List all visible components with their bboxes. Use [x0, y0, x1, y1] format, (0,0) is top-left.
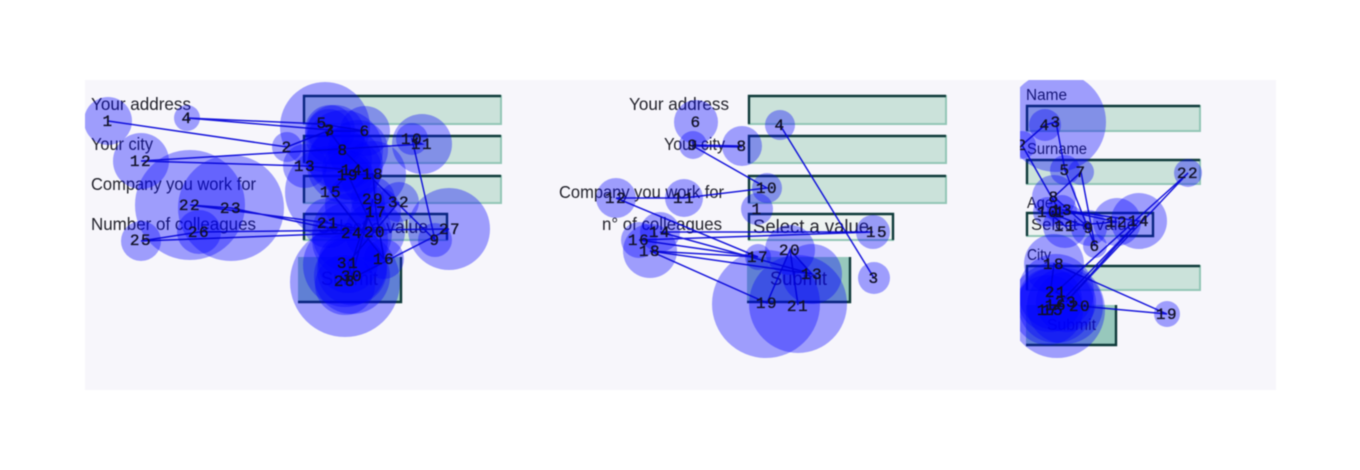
form 3 fixation numbers: 22: [1177, 165, 1199, 183]
background panel: [85, 80, 1276, 390]
form 1 fixation numbers: 25: [130, 232, 152, 250]
form 3 labels: Name: [1026, 87, 1067, 104]
form 2 fixation numbers: 15: [866, 224, 888, 242]
form 1 fixation numbers: 29: [362, 191, 384, 209]
form 1 labels: Number of colleagues: [91, 214, 256, 234]
form 2 fixation numbers: 19: [756, 295, 778, 313]
form 3 fixation numbers: 12: [1106, 214, 1128, 232]
form 1 fixation numbers: 20: [364, 224, 386, 242]
form 1 fixation circles: [84, 82, 490, 337]
form 1 fixation numbers: 30: [341, 268, 363, 286]
form 1 fixation numbers: 3: [324, 122, 336, 140]
form 1 fixation numbers: 19: [337, 167, 359, 185]
form 3 fixation numbers: 3: [1050, 114, 1062, 132]
form 1 fixation numbers: 24: [341, 225, 363, 243]
form 1 fixation numbers: [102, 110, 461, 291]
form 2 fixation numbers: 3: [868, 270, 880, 288]
form 3 fixation numbers: 2: [1016, 137, 1028, 155]
form 3 scanpath lines: [1022, 122, 1188, 314]
form 1 labels: [91, 94, 428, 290]
form 1 labels: Select a value: [318, 217, 428, 237]
form 2 labels: [559, 94, 869, 290]
form 3 fields: [1026, 106, 1200, 345]
panel: form 3 scanpath: [1006, 72, 1202, 358]
form 3 fixation numbers: 20: [1069, 298, 1091, 316]
form 3 fixation numbers: 9: [1083, 220, 1095, 238]
form 1 fixation numbers: 31: [337, 255, 359, 273]
form 3 fixation numbers: 16: [1045, 297, 1067, 315]
form 3 fixation numbers: 15: [1042, 302, 1064, 320]
form 1 fields: [298, 96, 501, 302]
form 2 fixation numbers: 1: [751, 201, 763, 219]
form 2 fixation numbers: 4: [774, 117, 786, 135]
form 3 fixation numbers: 10: [1037, 204, 1059, 222]
form 1 fixation numbers: 23: [220, 200, 242, 218]
panel: form 2 scanpath: [559, 94, 946, 358]
panel: form 1 scanpath: [84, 82, 501, 337]
form 2 fixation numbers: 13: [801, 266, 823, 284]
form 2 fixation numbers: 16: [628, 232, 650, 250]
form 1 fixation numbers: 14: [341, 162, 363, 180]
form 1 fixation numbers: 5: [316, 115, 328, 133]
form 1 fixation numbers: 2: [281, 139, 293, 157]
form 2 fixation circles: [596, 100, 890, 358]
form 2 fixation numbers: 10: [756, 180, 778, 198]
form 3 labels: City: [1027, 247, 1051, 264]
form 1 fixation numbers: 12: [130, 153, 152, 171]
form 1 labels: Your city: [91, 134, 153, 154]
form 3 fixation numbers: 21: [1045, 284, 1067, 302]
form 1 fixation numbers: 6: [359, 123, 371, 141]
form 1 scanpath lines: [108, 118, 449, 282]
form 1 fixation numbers: 15: [320, 184, 342, 202]
form 2 fixation numbers: 6: [690, 114, 702, 132]
form 3 fixation numbers: 7: [1075, 164, 1087, 182]
form 2 labels: Your city: [664, 134, 725, 154]
form 2 fixation numbers: 21: [787, 298, 809, 316]
form 3 fixation numbers: 1: [1054, 204, 1066, 222]
form 1 fixation numbers: 7: [323, 123, 335, 141]
form 2 labels: Select a value: [753, 217, 869, 238]
form 1 fixation numbers: 22: [179, 197, 201, 215]
form 2 labels: Submit: [770, 269, 828, 290]
form 1 fixation numbers: 32: [388, 194, 410, 212]
form 3 fixation numbers: [1016, 114, 1199, 324]
form 1 labels: Company you work for: [91, 174, 256, 194]
form 3 fixation numbers: 18: [1043, 256, 1065, 274]
form 3 labels: Submit: [1047, 317, 1097, 334]
form 1 fixation numbers: 26: [188, 224, 210, 242]
form 3 fixation numbers: 14: [1128, 213, 1150, 231]
form 3 labels: Select a value: [1031, 215, 1136, 234]
form 2 labels: Your address: [629, 94, 729, 114]
form 1 fixation numbers: 18: [362, 166, 384, 184]
form 1 fixation numbers: 8: [337, 142, 349, 160]
form 3 fixation numbers: 4: [1039, 117, 1051, 135]
form 3 fixation numbers: 13: [1051, 202, 1073, 220]
form 2 fixation numbers: 9: [687, 137, 699, 155]
form 1 fixation numbers: 11: [411, 136, 433, 154]
form 2 fixation numbers: 8: [736, 138, 748, 156]
form 1 fixation numbers: 17: [365, 204, 387, 222]
form 1 labels: Submit: [321, 269, 379, 290]
form 2 fixation numbers: 12: [605, 190, 627, 208]
form 2 fixation numbers: [605, 114, 888, 316]
form 1 fixation numbers: 1: [102, 113, 114, 131]
form 1 fixation numbers: 10: [401, 131, 423, 149]
form 1 fixation numbers: 16: [373, 251, 395, 269]
form 2 fixation numbers: 17: [747, 249, 769, 267]
form 3 fixation numbers: 17: [1037, 302, 1059, 320]
form 3 fixation numbers: 19: [1156, 306, 1178, 324]
form 3 fixation numbers: 11: [1054, 218, 1076, 236]
form 2 labels: Company you work for: [559, 182, 724, 202]
form 1 fixation numbers: 13: [294, 158, 316, 176]
form 3 labels: Age: [1027, 195, 1053, 212]
form 2 labels: n° of colleagues: [602, 214, 722, 234]
form 3 fixation numbers: 6: [1089, 238, 1101, 256]
form 1 fixation numbers: 9: [429, 232, 441, 250]
form 3 labels: [1026, 87, 1136, 334]
form 1 labels: Your address: [91, 94, 191, 114]
form 1 fixation numbers: 28: [334, 273, 356, 291]
form 2 fixation numbers: 14: [649, 224, 671, 242]
form 3 labels: Surname: [1027, 141, 1087, 158]
form 3 fixation circles: [1006, 72, 1202, 358]
form 2 fixation numbers: 11: [673, 190, 695, 208]
form 2 scanpath lines: [616, 125, 874, 305]
form 1 fixation numbers: 27: [439, 221, 461, 239]
form 2 fixation numbers: 20: [779, 242, 801, 260]
form 3 fixation numbers: 5: [1059, 162, 1071, 180]
form 1 fixation numbers: 4: [181, 110, 193, 128]
form 2 fixation numbers: 18: [639, 243, 661, 261]
form 2 fields: [747, 96, 946, 302]
form 3 fixation numbers: 23: [1055, 294, 1077, 312]
form 1 fixation numbers: 21: [317, 215, 339, 233]
form 3 fixation numbers: 8: [1048, 189, 1060, 207]
